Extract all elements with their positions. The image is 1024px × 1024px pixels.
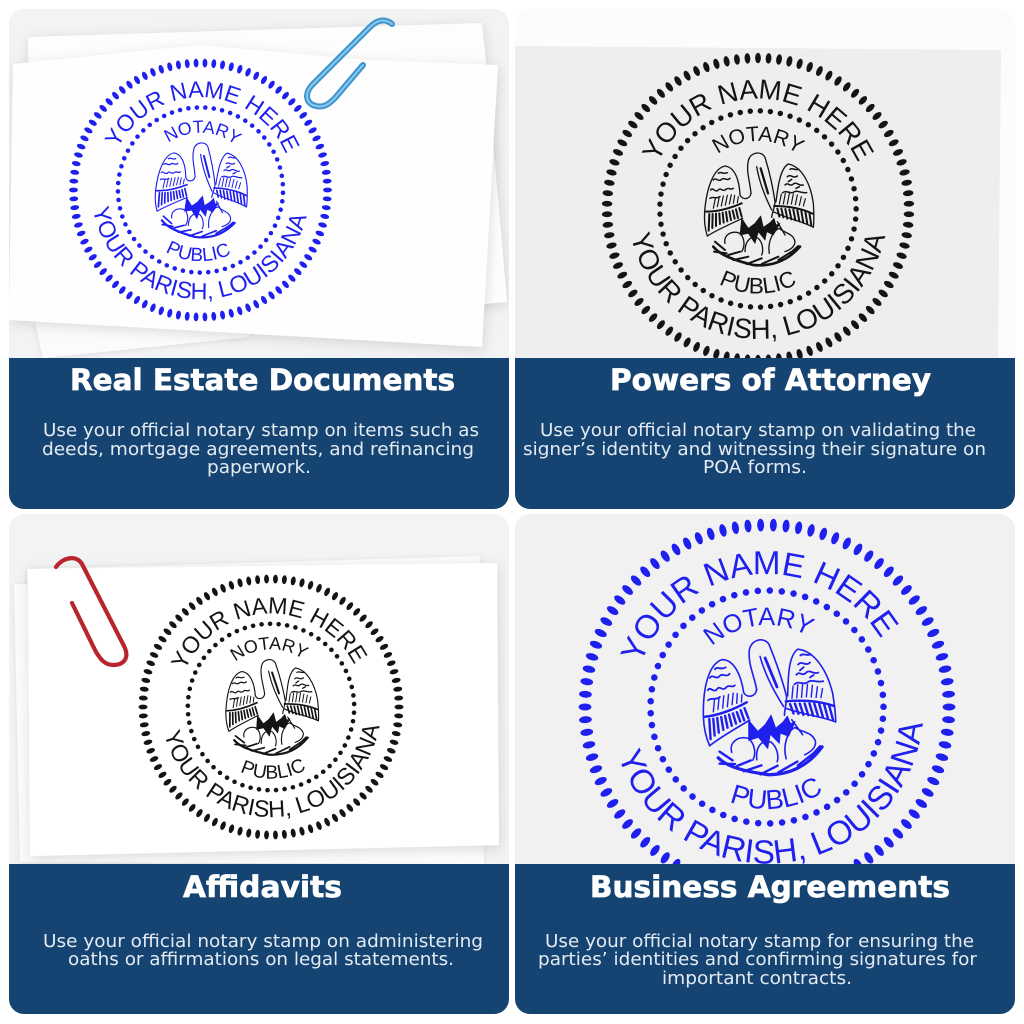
stamp: black Louisiana notary seal: PUBLIC xyxy=(720,270,796,294)
description: Use your official notary stamp on administering xyxy=(43,931,483,952)
caption band xyxy=(9,358,509,510)
stamp: blue Louisiana notary seal xyxy=(69,58,332,322)
panel: business agreements xyxy=(515,514,1015,1014)
stamp: black Louisiana notary seal xyxy=(602,52,914,358)
panel: real estate documents xyxy=(9,9,509,509)
photo: document sheet xyxy=(515,46,1001,358)
stamp: black Louisiana notary seal: NOTARY xyxy=(712,126,806,153)
stamp: black Louisiana notary seal: YOUR NAME HERE xyxy=(642,80,874,162)
description: POA forms. xyxy=(703,457,807,478)
stamp: black Louisiana notary seal: YOUR PARISH, LOUISIANA xyxy=(632,231,886,342)
description: Use your official notary stamp on items such as xyxy=(43,420,479,441)
description xyxy=(524,422,984,474)
heading: Powers of Attorney xyxy=(610,363,931,397)
description: paperwork. xyxy=(207,457,311,478)
stamp: blue Louisiana notary seal xyxy=(578,518,956,864)
heading: Business Agreements xyxy=(590,870,950,904)
description: deeds, mortgage agreements, and refinancing xyxy=(42,439,474,460)
stamp: black Louisiana notary seal: PUBLIC xyxy=(241,759,305,779)
stamp: blue Louisiana notary seal: YOUR PARISH, LOUISIANA xyxy=(94,206,307,302)
description: Use your official notary stamp for ensuring the xyxy=(545,931,974,952)
panel: affidavits xyxy=(9,514,509,1014)
heading: Real Estate Documents xyxy=(70,363,455,397)
stamp: blue Louisiana notary seal: NOTARY xyxy=(164,120,242,142)
stamp: blue Louisiana notary seal: YOUR NAME HERE xyxy=(620,551,899,656)
description xyxy=(538,931,978,989)
description: important contracts. xyxy=(662,968,852,989)
heading: Affidavits xyxy=(183,870,342,904)
stamp: blue Louisiana notary seal: NOTARY xyxy=(703,608,816,645)
description: parties’ identities and confirming signatures for xyxy=(538,949,978,970)
stamp: blue Louisiana notary seal: PUBLIC xyxy=(166,240,230,262)
caption band xyxy=(515,864,1015,1015)
icon: blue paperclip xyxy=(307,20,392,107)
stamp: blue Louisiana notary seal: PUBLIC xyxy=(731,778,821,810)
description: oaths or affirmations on legal statements. xyxy=(68,949,454,970)
stamp: black Louisiana notary seal: NOTARY xyxy=(230,636,310,661)
photo: paper stack xyxy=(9,9,509,359)
stamp: black Louisiana notary seal: YOUR PARISH, LOUISIANA xyxy=(166,726,380,819)
icon: red paperclip xyxy=(56,558,126,665)
description: Use your official notary stamp on validating the xyxy=(540,420,976,441)
stamp: black Louisiana notary seal xyxy=(138,574,404,840)
panel: powers of attorney xyxy=(515,46,1015,509)
stamp: blue Louisiana notary seal: YOUR PARISH, LOUISIANA xyxy=(621,723,923,864)
description xyxy=(42,420,479,478)
stamp: black Louisiana notary seal: YOUR NAME HERE xyxy=(170,597,368,665)
caption band xyxy=(9,864,509,1015)
description: signer’s identity and witnessing their signature on xyxy=(523,439,986,460)
photo: document sheet xyxy=(515,514,1015,865)
photo: paper stack xyxy=(9,514,509,865)
stamp: blue Louisiana notary seal: YOUR NAME HERE xyxy=(104,81,300,154)
caption band xyxy=(515,358,1015,510)
description xyxy=(44,934,482,968)
